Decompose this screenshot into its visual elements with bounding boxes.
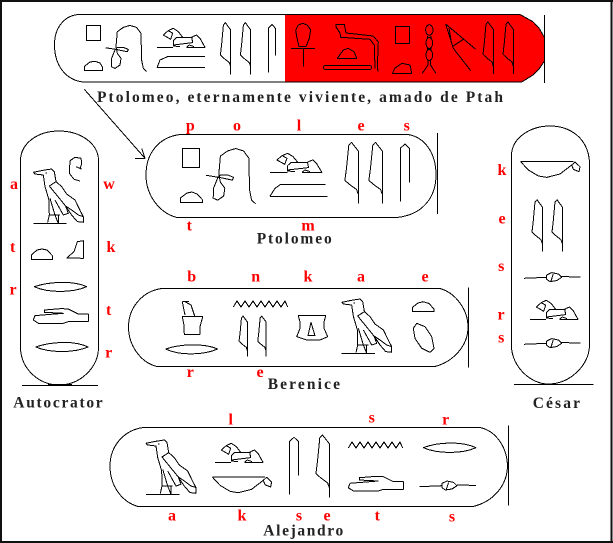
- outline: [128, 288, 468, 368]
- phonetic labels: r: [497, 306, 505, 323]
- glyph: lion l: [270, 153, 322, 172]
- glyph: reed e: [345, 142, 358, 204]
- phonetic labels: o: [233, 117, 241, 134]
- outline: [512, 126, 593, 384]
- glyph: tied cord s: [419, 481, 476, 490]
- glyph: hill k: [67, 241, 83, 258]
- glyph: reed e: [532, 200, 542, 252]
- phonetic labels: a: [168, 508, 176, 525]
- cartouche outline: [54, 14, 544, 83]
- phonetic labels: l: [297, 117, 302, 134]
- glyph: reed e: [220, 23, 231, 75]
- glyph: reed e: [552, 200, 562, 252]
- phonetic labels: [168, 409, 455, 525]
- glyph: quail curl w: [69, 157, 82, 181]
- glyph: oval e: [413, 323, 434, 352]
- phonetic labels: k: [107, 239, 116, 256]
- phonetic labels: t: [106, 302, 112, 319]
- glyph: reed e: [503, 22, 513, 74]
- glyph: lion l: [157, 28, 205, 47]
- glyph: lion l: [215, 443, 263, 462]
- phonetic labels: w: [103, 176, 115, 193]
- phonetic labels: s: [498, 258, 504, 275]
- glyph: bowl k: [212, 477, 272, 493]
- glyph: reed e: [239, 316, 247, 357]
- outline: [146, 133, 438, 218]
- cartouche: Autocrator: [9, 131, 116, 411]
- glyph: chisel angle: [446, 24, 476, 71]
- glyph: folded cloth s: [400, 144, 409, 202]
- glyph: reed e: [258, 316, 266, 357]
- glyph: bread t: [31, 249, 53, 259]
- glyph: slab m: [157, 56, 205, 68]
- glyph: bowl k: [521, 162, 580, 177]
- glyph: folded cloth s: [289, 437, 299, 494]
- glyph: rope o: [206, 149, 256, 204]
- phonetic labels: n: [251, 269, 260, 286]
- phonetic labels: e: [498, 210, 506, 227]
- red highlighted section: [285, 14, 544, 82]
- cartouche: César: [497, 126, 593, 412]
- phonetic labels: r: [9, 281, 17, 298]
- glyph: long bar: [324, 66, 372, 70]
- outline: [110, 426, 508, 506]
- glyph: reed e: [483, 22, 493, 74]
- phonetic labels: a: [357, 269, 365, 286]
- phonetic labels: b: [187, 269, 196, 286]
- cartouche: Alejandro: [110, 409, 508, 540]
- glyph: mouth r: [423, 443, 476, 452]
- outline: [20, 131, 98, 386]
- glyph: basket and leaf b: [182, 302, 203, 334]
- phonetic labels: s: [498, 330, 504, 347]
- phonetic labels: a: [10, 176, 18, 193]
- name: César: [533, 395, 580, 412]
- glyph: water zigzag n: [233, 301, 288, 307]
- phonetic labels: e: [421, 269, 429, 286]
- caption: Ptolomeo, eternamente viviente, amado de Ptah: [97, 89, 503, 106]
- glyph: folded cloth s: [268, 24, 275, 72]
- phonetic labels: [497, 162, 507, 347]
- phonetic labels: t: [187, 218, 193, 235]
- glyph: slab m: [270, 184, 328, 196]
- glyph: mouth r: [34, 282, 87, 291]
- glyph: twisted chain: [422, 25, 436, 73]
- glyph: red bread 2: [392, 63, 412, 73]
- name: Berenice: [268, 376, 340, 393]
- phonetic labels: r: [442, 411, 449, 428]
- phonetic labels: e: [357, 117, 365, 134]
- glyph: bread e: [412, 302, 434, 312]
- phonetic labels: [9, 176, 116, 361]
- phonetic labels: r: [105, 344, 112, 361]
- phonetic labels: s: [404, 117, 410, 134]
- phonetic labels: k: [238, 508, 247, 525]
- phonetic labels: t: [10, 239, 16, 256]
- glyph: hand t: [348, 476, 403, 491]
- glyph: tied cord s: [524, 339, 581, 348]
- glyph: water zigzag s: [348, 442, 403, 448]
- cartouche: Ptolomeo, eternamente viviente, amado de Ptah: [54, 14, 544, 83]
- glyph: lion r: [530, 300, 578, 319]
- glyph: ankh: [291, 23, 315, 67]
- glyph: mouth r: [166, 345, 218, 354]
- name: Ptolomeo: [257, 230, 332, 247]
- phonetic labels: m: [301, 218, 315, 235]
- glyph: bread t: [180, 192, 203, 202]
- glyph: reed e: [369, 142, 382, 204]
- glyph: tied cord s: [524, 273, 581, 282]
- phonetic labels: k: [498, 162, 507, 179]
- glyph: red square: [396, 26, 410, 44]
- cartouche: Berenice: [128, 269, 468, 393]
- glyph: vulture a: [146, 440, 196, 494]
- phonetic labels: s: [369, 409, 375, 426]
- cartouche: Ptolomeo: [146, 117, 438, 247]
- name: Alejandro: [263, 523, 344, 540]
- phonetic labels: p: [186, 117, 195, 134]
- phonetic labels: t: [375, 508, 381, 525]
- phonetic labels: r: [187, 364, 194, 381]
- glyph: mouth r: [36, 342, 88, 352]
- phonetic labels: s: [296, 508, 302, 525]
- glyph: vulture a: [33, 169, 83, 223]
- glyph: vulture a: [342, 299, 392, 353]
- phonetic labels: [187, 269, 429, 381]
- phonetic labels: k: [304, 269, 313, 286]
- glyph: basket k: [297, 316, 328, 340]
- phonetic labels: [186, 117, 410, 235]
- glyph: rope o: [105, 25, 147, 71]
- phonetic labels: l: [228, 411, 233, 428]
- glyph: reed e: [240, 23, 251, 75]
- glyph: bread t: [84, 61, 103, 70]
- glyph: red bread: [337, 48, 357, 58]
- glyph: square p: [182, 148, 200, 168]
- glyph: hook shape: [336, 24, 378, 72]
- glyph: hand t: [33, 309, 88, 323]
- glyph: square p: [86, 26, 100, 40]
- glyph: reed e: [316, 435, 329, 497]
- arrow: [84, 89, 145, 158]
- phonetic labels: e: [323, 508, 331, 525]
- name: Autocrator: [13, 394, 103, 411]
- phonetic labels: e: [256, 364, 264, 381]
- phonetic labels: s: [449, 508, 455, 525]
